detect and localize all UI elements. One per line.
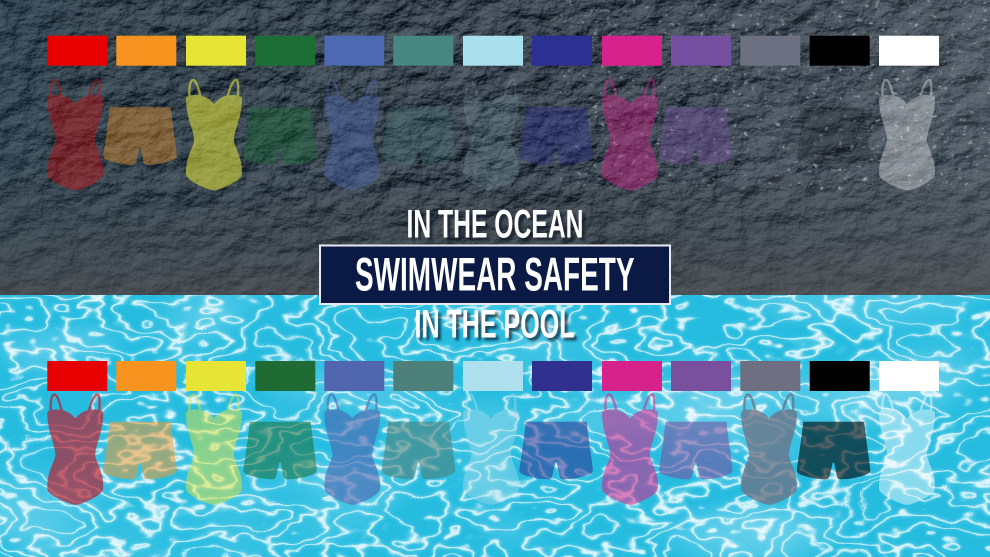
pool swimwear silhouettes (47, 394, 935, 505)
pool colour swatches (47, 361, 939, 391)
ocean colour swatches (47, 36, 939, 66)
title banner: swimwear safety: SWIMWEAR SAFETY (355, 249, 634, 302)
panel: pool water background (0, 295, 990, 557)
heading: in the ocean: IN THE OCEAN (406, 203, 584, 247)
title banner: swimwear safety (320, 246, 670, 304)
ocean swimwear silhouettes (47, 80, 935, 190)
heading: in the pool: IN THE POOL (414, 303, 574, 347)
panel: ocean water background (0, 0, 990, 296)
